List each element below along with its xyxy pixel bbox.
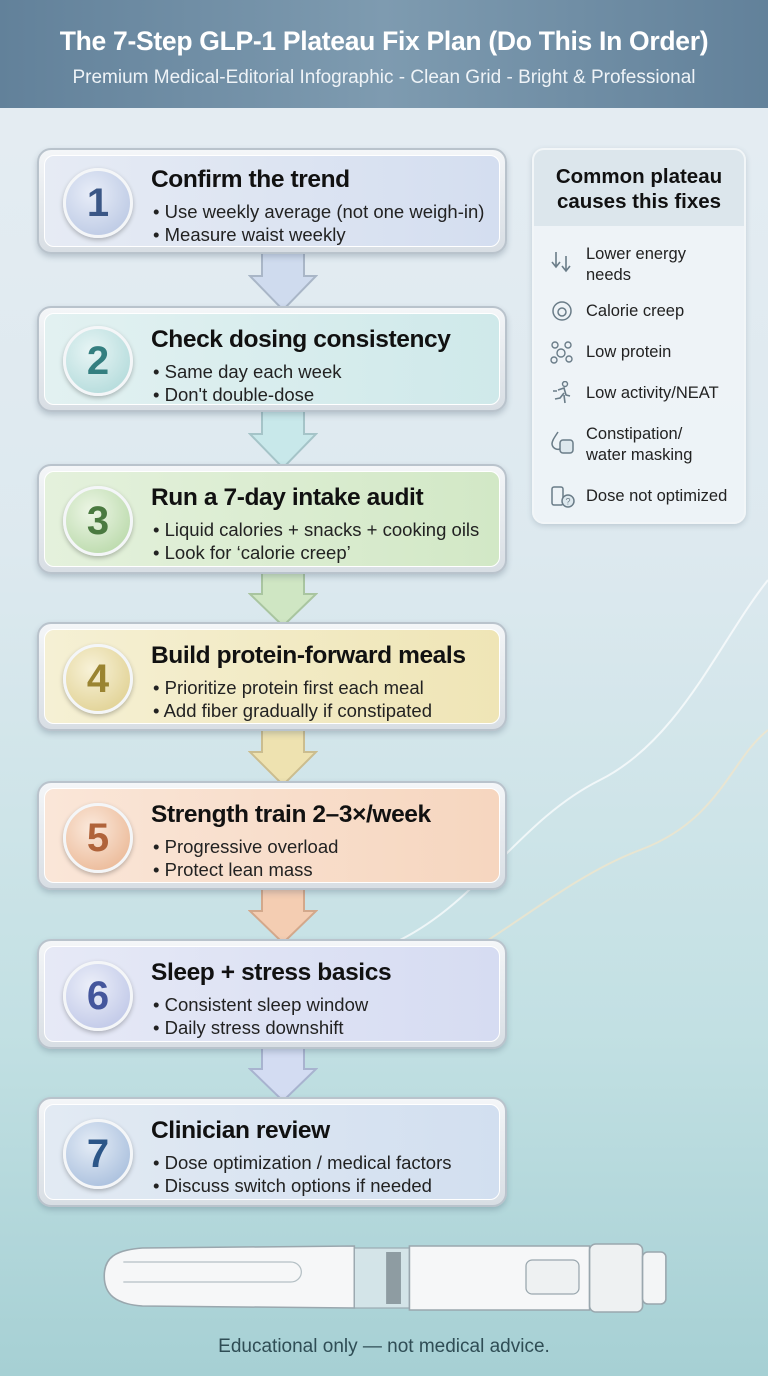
sidebar heading: Common plateau	[556, 165, 722, 188]
number 2	[63, 326, 133, 396]
sidebar: common causes: ?	[566, 496, 571, 506]
arrow 4-5	[248, 731, 318, 781]
number 1: 1	[87, 181, 109, 225]
cause 4	[553, 381, 719, 404]
number 5	[63, 803, 133, 873]
title 1: Confirm the trend	[151, 166, 350, 193]
number 5: 5	[87, 816, 109, 860]
title 5: Strength train 2–3×/week	[151, 801, 431, 828]
cause 6	[551, 486, 727, 508]
title 6: Sleep + stress basics	[151, 959, 391, 986]
bullets 1	[153, 201, 484, 245]
step 4	[37, 622, 507, 731]
bullets 6: • Daily stress downshift	[153, 1017, 344, 1038]
cause 1	[552, 245, 686, 284]
arrow 6-7	[248, 1049, 318, 1097]
title 2: Check dosing consistency	[151, 326, 450, 353]
bullets 7: • Discuss switch options if needed	[153, 1175, 432, 1196]
sidebar: common causes: Constipation/	[586, 425, 682, 443]
number 4: 4	[87, 657, 109, 701]
bullets 1: • Use weekly average (not one weigh-in)	[153, 201, 484, 222]
bullets 6	[153, 994, 368, 1038]
bullets 5: • Protect lean mass	[153, 859, 313, 880]
title 3: Run a 7-day intake audit	[151, 484, 423, 511]
bullets 2	[153, 361, 342, 405]
bullets 4: • Prioritize protein first each meal	[153, 677, 424, 698]
cause 3	[550, 341, 671, 364]
number 6	[63, 961, 133, 1031]
arrow 1-2	[248, 254, 318, 306]
bullets 3	[153, 519, 479, 563]
bullets 4: • Add fiber gradually if constipated	[153, 700, 432, 721]
title 7: Clinician review	[151, 1117, 330, 1144]
number 7	[63, 1119, 133, 1189]
sidebar: common causes: needs	[586, 266, 631, 284]
title 4: Build protein-forward meals	[151, 642, 466, 669]
sidebar: common causes	[532, 148, 746, 524]
cause 2	[552, 301, 684, 321]
number 2: 2	[87, 339, 109, 383]
bullets 7	[153, 1152, 451, 1196]
number 3: 3	[87, 499, 109, 543]
background chart lines	[400, 580, 768, 939]
number 6: 6	[87, 974, 109, 1018]
header	[0, 0, 768, 108]
header: The 7-Step GLP-1 Plateau Fix Plan (Do This In Order)	[60, 26, 708, 56]
sidebar: common causes: Calorie creep	[586, 302, 684, 320]
header: Premium Medical-Editorial Infographic - Clean Grid - Bright & Professional	[72, 67, 696, 88]
step 1	[37, 148, 507, 254]
bullets 3: • Liquid calories + snacks + cooking oils	[153, 519, 479, 540]
bullets 6: • Consistent sleep window	[153, 994, 368, 1015]
illustration: injection pen	[104, 1243, 667, 1313]
footer disclaimer: Educational only — not medical advice.	[218, 1336, 550, 1357]
sidebar: common causes: Low activity/NEAT	[586, 384, 719, 402]
bullets 7: • Dose optimization / medical factors	[153, 1152, 451, 1173]
bullets 3: • Look for ‘calorie creep’	[153, 542, 351, 563]
arrow 5-6	[248, 890, 318, 939]
step 7	[37, 1097, 507, 1207]
step 2	[37, 306, 507, 412]
sidebar: common causes: Lower energy	[586, 245, 686, 263]
arrow 3-4	[248, 574, 318, 622]
sidebar: common causes: Low protein	[586, 343, 671, 361]
sidebar: common causes: Dose not optimized	[586, 487, 727, 505]
bullets 2: • Same day each week	[153, 361, 342, 382]
sidebar: common causes: water masking	[586, 446, 692, 464]
step 6	[37, 939, 507, 1049]
bullets 2: • Don't double-dose	[153, 384, 314, 405]
number 7: 7	[87, 1132, 109, 1176]
sidebar heading	[534, 150, 744, 226]
number 4	[63, 644, 133, 714]
arrow 2-3	[248, 412, 318, 464]
bullets 5	[153, 836, 338, 880]
step 5	[37, 781, 507, 890]
step 3	[37, 464, 507, 574]
bullets 4	[153, 677, 432, 721]
bullets 5: • Progressive overload	[153, 836, 338, 857]
bullets 1: • Measure waist weekly	[153, 224, 346, 245]
sidebar heading: causes this fixes	[557, 190, 721, 213]
number 3	[63, 486, 133, 556]
number 1	[63, 168, 133, 238]
cause 5	[551, 425, 692, 464]
